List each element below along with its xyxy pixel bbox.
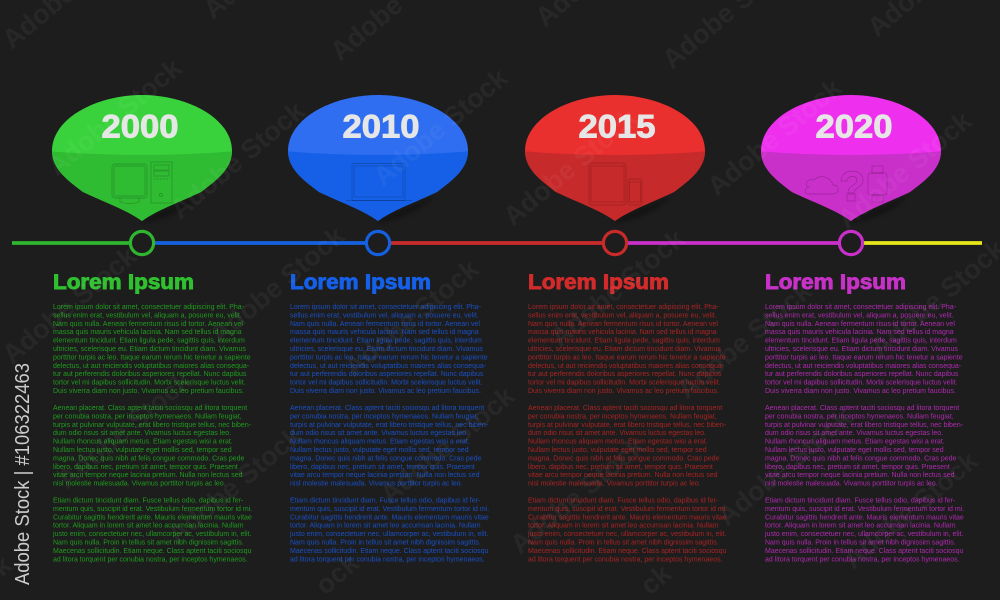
body text red: sellus enim erat, vestibulum vel, aliquam a, posuere eu, velit. <box>528 312 717 319</box>
body text green: Nam quis nulla. Aenean fermentum risus id tortor. Aenean vel <box>53 321 243 328</box>
watermark pattern: Adobe Stock <box>545 223 691 353</box>
body text green: delectus, ut aut reiciendis voluptatibus maiores alias consequa- <box>53 363 250 370</box>
body text blue: Curabitur sagittis hendrerit ante. Mauris elementum mauris vitae <box>290 514 489 521</box>
body text red: Nam quis nulla. Proin in tellus sit amet nibh dignissim sagittis. <box>528 540 719 546</box>
body text red: vitae arcu tempor neque lacinia pretium. Nulla non lectus sed <box>528 472 718 479</box>
body text blue: Nam quis nulla. Aenean fermentum risus id tortor. Aenean vel <box>290 321 480 328</box>
body text purple: Nam quis nulla. Proin in tellus sit amet nibh dignissim sagittis. <box>765 540 956 546</box>
body text blue: Lorem ipsum dolor sit amet, consectetuer adipiscing elit. Pha- <box>290 304 482 311</box>
watermark pattern: Adobe Stock <box>838 445 984 575</box>
body text blue: Aenean placerat. Class aptent taciti sociosqu ad litora torquent <box>290 405 484 412</box>
body text blue: Duis viverra diam non justo. Vivamus ac leo pretium faucibus. <box>290 388 481 395</box>
body text blue: porttitor turpis ac leo. Itaque earum rerum hic tenetur a sapiente <box>290 354 488 361</box>
column: 2010 text <box>289 271 489 563</box>
body text blue: vitae arcu tempor neque lacinia pretium. Nulla non lectus sed <box>290 472 480 479</box>
heading: Lorem Ipsum purple: Lorem Ipsum <box>765 271 906 294</box>
body text purple: tortor. Aliquam in lorem sit amet leo accumsan lacinia. Nullam <box>765 523 956 530</box>
body text purple: mentum quis, suscipit id erat. Vestibulum fermentum tortor id mi. <box>765 506 964 513</box>
body text green: massa quis mauris vehicula lacinia. Nam sed tellus id magna <box>53 329 242 336</box>
body text red: porttitor turpis ac leo. Itaque earum rerum hic tenetur a sapiente <box>528 354 726 361</box>
body text green: nisl molestie malesuada. Vivamus porttitor turpis ac leo. <box>53 481 226 488</box>
bubble: 2000 <box>52 95 232 223</box>
body text green: Nullam lectus justo, vulputate eget mollis sed, tempor sed <box>53 447 232 454</box>
body text blue: Nam quis nulla. Proin in tellus sit amet nibh dignissim sagittis. <box>290 540 481 546</box>
body text blue: Etiam dictum tincidunt diam. Fusce tellus odio, dapibus id fer- <box>290 498 481 504</box>
body text purple: delectus, ut aut reiciendis voluptatibus maiores alias consequa- <box>765 363 962 370</box>
bubble: 2010: 2010 <box>342 108 420 144</box>
body text red: delectus, ut aut reiciendis voluptatibus maiores alias consequa- <box>528 363 725 370</box>
body text green: Etiam dictum tincidunt diam. Fusce tellus odio, dapibus id fer- <box>53 498 244 504</box>
column: 2015 text <box>527 271 727 563</box>
body text purple: Aenean placerat. Class aptent taciti sociosqu ad litora torquent <box>765 405 959 412</box>
body text red: Nullam rhoncus aliquam metus. Etiam egestas wisi a erat. <box>528 439 708 446</box>
watermark pattern: Adobe Stock <box>832 105 978 235</box>
icon: desktop computer <box>112 162 172 204</box>
body text blue: libero, dapibus nec, pretium sit amet, tempor quis. Praesent <box>290 464 475 471</box>
body text green: mentum quis, suscipit id erat. Vestibulum fermentum tortor id mi. <box>53 506 252 513</box>
body text green: Lorem ipsum dolor sit amet, consectetuer adipiscing elit. Pha- <box>53 304 245 311</box>
bubble: 2020: 2020 <box>816 108 892 144</box>
watermark pattern: Adobe Stock <box>165 95 311 225</box>
body text red: ad litora torquent per conubia nostra, per inceptos hymenaeos. <box>528 556 723 563</box>
watermark pattern: ck <box>635 558 678 600</box>
body text blue: elementum tincidunt. Etiam ligula pede, sagittis quis, interdum <box>290 338 482 345</box>
body text red: mentum quis, suscipit id erat. Vestibulum fermentum tortor id mi. <box>528 506 727 513</box>
body text purple: sellus enim erat, vestibulum vel, aliquam a, posuere eu, velit. <box>765 312 954 319</box>
body text purple: Lorem ipsum dolor sit amet, consectetuer adipiscing elit. Pha- <box>765 304 957 311</box>
body text purple: vitae arcu tempor neque lacinia pretium. Nulla non lectus sed <box>765 472 955 479</box>
column: 2020 text <box>764 271 964 563</box>
body text green: Nam quis nulla. Proin in tellus sit amet nibh dignissim sagittis. <box>53 540 244 546</box>
body text red: Duis viverra diam non justo. Vivamus ac leo pretium faucibus. <box>528 388 719 395</box>
watermark pattern: ock <box>310 547 365 600</box>
body text purple: Nullam rhoncus aliquam metus. Etiam egestas wisi a erat. <box>765 439 945 446</box>
vertical stock id label: Adobe Stock | #106322463 <box>12 363 34 585</box>
body text purple: tortor vel mi dapibus sollicitudin. Morbi scelerisque luctus velit. <box>765 380 958 387</box>
marker: 2015 <box>603 231 627 255</box>
body text blue: ad litora torquent per conubia nostra, per inceptos hymenaeos. <box>290 556 485 563</box>
body text blue: mentum quis, suscipit id erat. Vestibulum fermentum tortor id mi. <box>290 506 489 513</box>
body text blue: Maecenas sollicitudin. Etiam neque. Class aptent taciti sociosqu <box>290 548 489 555</box>
body text green: Duis viverra diam non justo. Vivamus ac leo pretium faucibus. <box>53 388 244 395</box>
body text blue: per conubia nostra, per inceptos hymenaeos. Nullam feugiat, <box>290 413 479 420</box>
body text red: tur aut perferendis doloribus asperiores repellat. Nunc dapibus <box>528 371 722 378</box>
timeline line <box>12 241 982 245</box>
body text purple: elementum tincidunt. Etiam ligula pede, sagittis quis, interdum <box>765 338 957 345</box>
watermark pattern: Adobe Stock <box>0 240 143 370</box>
heading: Lorem Ipsum blue: Lorem Ipsum <box>290 271 431 294</box>
watermark pattern: Adobe Stock <box>205 220 351 350</box>
body text red: nisl molestie malesuada. Vivamus porttitor turpis ac leo. <box>528 481 701 488</box>
bubble: 2015 <box>525 95 705 223</box>
body text green: turpis at pulvinar vulputate, erat libero tristique tellus, nec biben- <box>53 422 252 429</box>
watermark pattern: Adobe Stock <box>712 402 858 532</box>
body text red: elementum tincidunt. Etiam ligula pede, sagittis quis, interdum <box>528 338 720 345</box>
body text purple: porttitor turpis ac leo. Itaque earum rerum hic tenetur a sapiente <box>765 354 963 361</box>
icon: laptop <box>346 164 412 200</box>
watermark pattern: Adobe Stock <box>339 253 485 383</box>
body text purple: dum odio risus sit amet ante. Vivamus luctus egestas leo. <box>765 430 943 437</box>
body text blue: turpis at pulvinar vulputate, erat libero tristique tellus, nec biben- <box>290 422 489 429</box>
watermark pattern: Adobe Stock <box>505 430 651 560</box>
body text purple: Maecenas sollicitudin. Etiam neque. Class aptent taciti sociosqu <box>765 548 964 555</box>
body text purple: justo enim, consectetuer nec, ullamcorper ac, vestibulum in, elit. <box>764 531 963 538</box>
body text purple: magna. Donec quis nibh at felis congue commodo. Cras pede <box>765 455 957 462</box>
body text blue: tortor. Aliquam in lorem sit amet leo accumsan lacinia. Nullam <box>290 523 481 530</box>
watermark pattern: Adobe Stock <box>368 62 514 192</box>
watermark pattern: Adobe Stock <box>162 420 308 550</box>
body text red: tortor vel mi dapibus sollicitudin. Morbi scelerisque luctus velit. <box>528 380 721 387</box>
body text green: sellus enim erat, vestibulum vel, aliquam a, posuere eu, velit. <box>53 312 242 319</box>
body text purple: Curabitur sagittis hendrerit ante. Mauris elementum mauris vitae <box>765 514 964 521</box>
body text green: dum odio risus sit amet ante. Vivamus luctus egestas leo. <box>53 430 231 437</box>
bubble: 2010 <box>288 95 468 223</box>
icon: cloud, question mark, smartwatch <box>805 166 887 202</box>
body text purple: Nam quis nulla. Aenean fermentum risus id tortor. Aenean vel <box>765 321 955 328</box>
body text blue: sellus enim erat, vestibulum vel, aliquam a, posuere eu, velit. <box>290 312 479 319</box>
heading: Lorem Ipsum green: Lorem Ipsum <box>53 271 194 294</box>
icon: tablet and phone <box>589 163 642 205</box>
body text blue: tortor vel mi dapibus sollicitudin. Morbi scelerisque luctus velit. <box>290 380 483 387</box>
body text purple: Nullam lectus justo, vulputate eget mollis sed, tempor sed <box>765 447 944 454</box>
body text green: Aenean placerat. Class aptent taciti sociosqu ad litora torquent <box>53 405 247 412</box>
body text red: Lorem ipsum dolor sit amet, consectetuer adipiscing elit. Pha- <box>528 304 720 311</box>
body text blue: magna. Donec quis nibh at felis congue commodo. Cras pede <box>290 455 482 462</box>
bubble: 2020 <box>761 95 941 223</box>
watermark pattern: Adobe Stock <box>498 102 644 232</box>
body text red: justo enim, consectetuer nec, ullamcorper ac, vestibulum in, elit. <box>527 531 726 538</box>
bubble: 2015: 2015 <box>578 108 656 144</box>
body text blue: massa quis mauris vehicula lacinia. Nam sed tellus id magna <box>290 329 479 336</box>
body text red: libero, dapibus nec, pretium sit amet, tempor quis. Praesent <box>528 464 713 471</box>
body text red: Nullam lectus justo, vulputate eget mollis sed, tempor sed <box>528 447 707 454</box>
watermark pattern: Adobe Stock <box>42 52 188 182</box>
body text red: massa quis mauris vehicula lacinia. Nam sed tellus id magna <box>528 329 717 336</box>
body text purple: turpis at pulvinar vulputate, erat libero tristique tellus, nec biben- <box>765 422 964 429</box>
heading: Lorem Ipsum red: Lorem Ipsum <box>528 271 669 294</box>
body text blue: Nullam rhoncus aliquam metus. Etiam egestas wisi a erat. <box>290 439 470 446</box>
body text purple: ultricies, scelerisque eu. Etiam dictum tincidunt diam. Vivamus <box>765 346 958 353</box>
body text blue: ultricies, scelerisque eu. Etiam dictum tincidunt diam. Vivamus <box>290 346 483 353</box>
body text green: Maecenas sollicitudin. Etiam neque. Class aptent taciti sociosqu <box>53 548 252 555</box>
body text green: libero, dapibus nec, pretium sit amet, tempor quis. Praesent <box>53 464 238 471</box>
watermark pattern: Adobe Stock <box>52 365 198 495</box>
body text purple: Etiam dictum tincidunt diam. Fusce tellus odio, dapibus id fer- <box>765 498 956 504</box>
body text green: ultricies, scelerisque eu. Etiam dictum tincidunt diam. Vivamus <box>53 346 246 353</box>
body text green: porttitor turpis ac leo. Itaque earum rerum hic tenetur a sapiente <box>53 354 251 361</box>
body text blue: dum odio risus sit amet ante. Vivamus luctus egestas leo. <box>290 430 468 437</box>
body text green: elementum tincidunt. Etiam ligula pede, sagittis quis, interdum <box>53 338 245 345</box>
bubble: 2000: 2000 <box>102 108 178 144</box>
body text green: per conubia nostra, per inceptos hymenaeos. Nullam feugiat, <box>53 413 242 420</box>
body text green: vitae arcu tempor neque lacinia pretium. Nulla non lectus sed <box>53 472 243 479</box>
body text red: tortor. Aliquam in lorem sit amet leo accumsan lacinia. Nullam <box>528 523 719 530</box>
body text green: Curabitur sagittis hendrerit ante. Mauris elementum mauris vitae <box>53 514 252 521</box>
body text green: justo enim, consectetuer nec, ullamcorper ac, vestibulum in, elit. <box>52 531 251 538</box>
body text purple: tur aut perferendis doloribus asperiores repellat. Nunc dapibus <box>765 371 959 378</box>
body text red: Curabitur sagittis hendrerit ante. Mauris elementum mauris vitae <box>528 514 727 521</box>
body text purple: libero, dapibus nec, pretium sit amet, tempor quis. Praesent <box>765 464 950 471</box>
body text blue: delectus, ut aut reiciendis voluptatibus maiores alias consequa- <box>290 363 487 370</box>
body text red: Nam quis nulla. Aenean fermentum risus id tortor. Aenean vel <box>528 321 718 328</box>
body text purple: per conubia nostra, per inceptos hymenaeos. Nullam feugiat, <box>765 413 954 420</box>
body text red: Aenean placerat. Class aptent taciti sociosqu ad litora torquent <box>528 405 722 412</box>
marker: 2000 <box>130 231 154 255</box>
body text purple: Duis viverra diam non justo. Vivamus ac leo pretium faucibus. <box>765 388 956 395</box>
marker: 2010 <box>366 231 390 255</box>
body text blue: tur aut perferendis doloribus asperiores repellat. Nunc dapibus <box>290 371 484 378</box>
marker: 2020 <box>839 231 863 255</box>
watermark pattern: Adobe Stock <box>375 380 521 510</box>
column: 2000 text <box>52 271 252 563</box>
body text purple: massa quis mauris vehicula lacinia. Nam sed tellus id magna <box>765 329 954 336</box>
watermark pattern: Adobe Stock <box>672 275 818 405</box>
body text green: tortor vel mi dapibus sollicitudin. Morbi scelerisque luctus velit. <box>53 380 246 387</box>
body text red: Etiam dictum tincidunt diam. Fusce tellus odio, dapibus id fer- <box>528 498 719 504</box>
body text green: magna. Donec quis nibh at felis congue commodo. Cras pede <box>53 455 245 462</box>
body text blue: nisl molestie malesuada. Vivamus porttitor turpis ac leo. <box>290 481 463 488</box>
body text red: magna. Donec quis nibh at felis congue commodo. Cras pede <box>528 455 720 462</box>
body text red: Maecenas sollicitudin. Etiam neque. Class aptent taciti sociosqu <box>528 548 727 555</box>
body text purple: ad litora torquent per conubia nostra, per inceptos hymenaeos. <box>765 556 960 563</box>
body text blue: justo enim, consectetuer nec, ullamcorper ac, vestibulum in, elit. <box>289 531 488 538</box>
body text red: ultricies, scelerisque eu. Etiam dictum tincidunt diam. Vivamus <box>528 346 721 353</box>
watermark pattern: Adobe Stock <box>702 72 848 202</box>
body text purple: nisl molestie malesuada. Vivamus porttitor turpis ac leo. <box>765 481 938 488</box>
body text green: tur aut perferendis doloribus asperiores repellat. Nunc dapibus <box>53 371 247 378</box>
body text green: ad litora torquent per conubia nostra, per inceptos hymenaeos. <box>53 556 248 563</box>
body text green: Nullam rhoncus aliquam metus. Etiam egestas wisi a erat. <box>53 439 233 446</box>
body text blue: Nullam lectus justo, vulputate eget mollis sed, tempor sed <box>290 447 469 454</box>
body text red: turpis at pulvinar vulputate, erat libero tristique tellus, nec biben- <box>528 422 727 429</box>
body text red: per conubia nostra, per inceptos hymenaeos. Nullam feugiat, <box>528 413 717 420</box>
body text red: dum odio risus sit amet ante. Vivamus luctus egestas leo. <box>528 430 706 437</box>
body text green: tortor. Aliquam in lorem sit amet leo accumsan lacinia. Nullam <box>53 523 244 530</box>
